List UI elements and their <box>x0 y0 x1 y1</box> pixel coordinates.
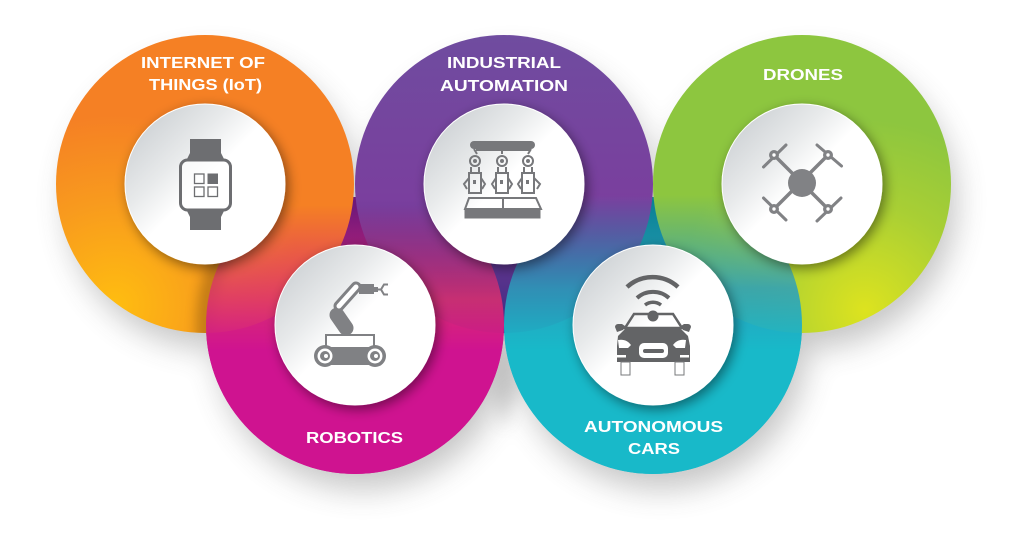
heading: industrial automation <box>440 55 568 95</box>
disc: robotics <box>275 245 435 405</box>
icon: drone <box>764 145 842 221</box>
circle: internet of things <box>56 35 354 333</box>
overlap blend: autonomous cars <box>504 176 802 474</box>
ground shadow <box>66 55 957 490</box>
icon: factory automation <box>464 141 541 218</box>
circle: autonomous cars base <box>504 176 802 474</box>
heading: autonomous cars: CARS <box>628 441 680 458</box>
heading: internet of things: THINGS (IoT) <box>149 77 262 94</box>
disc: drones <box>722 104 882 264</box>
wedge shadow between lower circles <box>492 340 518 430</box>
heading: internet of things <box>141 55 265 94</box>
disc: internet of things <box>125 104 285 264</box>
icon: connected car <box>615 277 691 375</box>
disc: industrial automation <box>424 104 584 264</box>
circle: industrial automation <box>355 35 653 333</box>
heading: autonomous cars <box>584 419 723 458</box>
heading: drones: DRONES <box>763 67 843 84</box>
overlap blend: robotics <box>206 176 504 474</box>
heading: autonomous cars: AUTONOMOUS <box>584 419 723 436</box>
circle: robotics base <box>206 176 504 474</box>
disc: autonomous cars <box>573 245 733 405</box>
circle: drones <box>653 35 951 333</box>
heading: industrial automation: AUTOMATION <box>440 78 568 95</box>
heading: industrial automation: INDUSTRIAL <box>447 55 561 72</box>
heading: robotics: ROBOTICS <box>306 430 403 447</box>
heading: internet of things: INTERNET OF <box>141 55 265 72</box>
icon: smartwatch <box>180 139 230 230</box>
icon: robot arm <box>314 284 388 367</box>
